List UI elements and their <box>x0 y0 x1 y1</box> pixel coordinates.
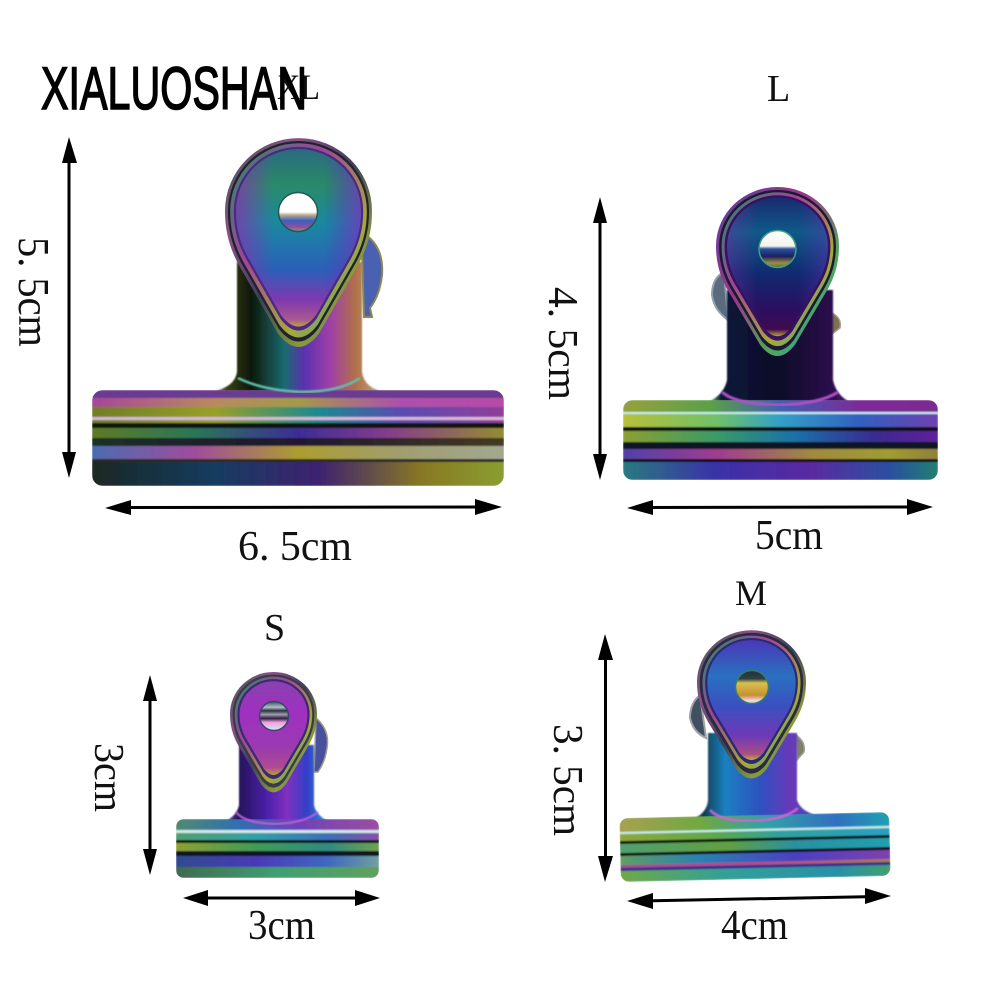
panel: S clip <box>176 672 379 878</box>
measurement: L width: 5cm <box>755 513 823 559</box>
size label L: L <box>767 68 790 110</box>
M clip neck highlight <box>710 808 798 821</box>
L clip neck <box>710 290 848 401</box>
arrow: L height <box>593 197 607 480</box>
L clip right spring <box>832 313 840 334</box>
S clip jaw <box>176 819 379 878</box>
arrow: M width <box>627 888 891 909</box>
arrow: XL height <box>62 137 77 478</box>
measurement: XL height: 5. 5cm <box>9 237 58 347</box>
M clip right spring <box>796 735 804 760</box>
L clip neck highlight <box>722 392 838 405</box>
panel: XL clip <box>92 138 504 486</box>
L clip left spring <box>712 272 728 320</box>
XL clip jaw <box>92 390 504 486</box>
arrow: M height <box>598 634 613 882</box>
S clip teardrop <box>230 672 317 792</box>
M clip hole <box>736 670 768 704</box>
measurement: M height: 3. 5cm <box>544 724 590 836</box>
brand logo: XIALUOSHAN <box>41 55 307 122</box>
panel: L clip <box>623 187 938 480</box>
arrow: XL width <box>105 499 502 515</box>
arrow: S width <box>183 890 380 906</box>
XL clip neck <box>215 262 380 391</box>
M clip jaw <box>619 812 891 882</box>
arrow: L width <box>627 499 933 515</box>
S clip spring <box>314 718 328 772</box>
measurement: S width: 3cm <box>248 903 315 949</box>
size label M: M <box>735 573 767 613</box>
S clip hole <box>260 702 288 730</box>
L clip jaw <box>623 400 938 480</box>
XL clip neck highlight <box>238 378 360 392</box>
measurement: L height: 4. 5cm <box>539 287 585 400</box>
XL clip spring <box>362 235 382 317</box>
S clip neck <box>226 745 328 821</box>
L clip teardrop <box>716 187 839 356</box>
XL clip hole <box>278 192 318 232</box>
measurement: M width: 4cm <box>721 903 788 949</box>
size label S: S <box>264 607 285 649</box>
arrow: S height <box>143 675 157 875</box>
panel: M clip <box>619 630 891 882</box>
S clip neck highlight <box>236 812 318 824</box>
M clip left spring <box>690 695 706 738</box>
size label XL: XL <box>277 67 320 107</box>
measurement: XL width: 6. 5cm <box>238 524 352 570</box>
M clip teardrop <box>697 630 806 778</box>
measurement: S height: 3cm <box>85 743 131 812</box>
M clip neck <box>695 733 815 818</box>
XL clip teardrop <box>225 138 372 347</box>
L clip hole <box>759 230 796 268</box>
